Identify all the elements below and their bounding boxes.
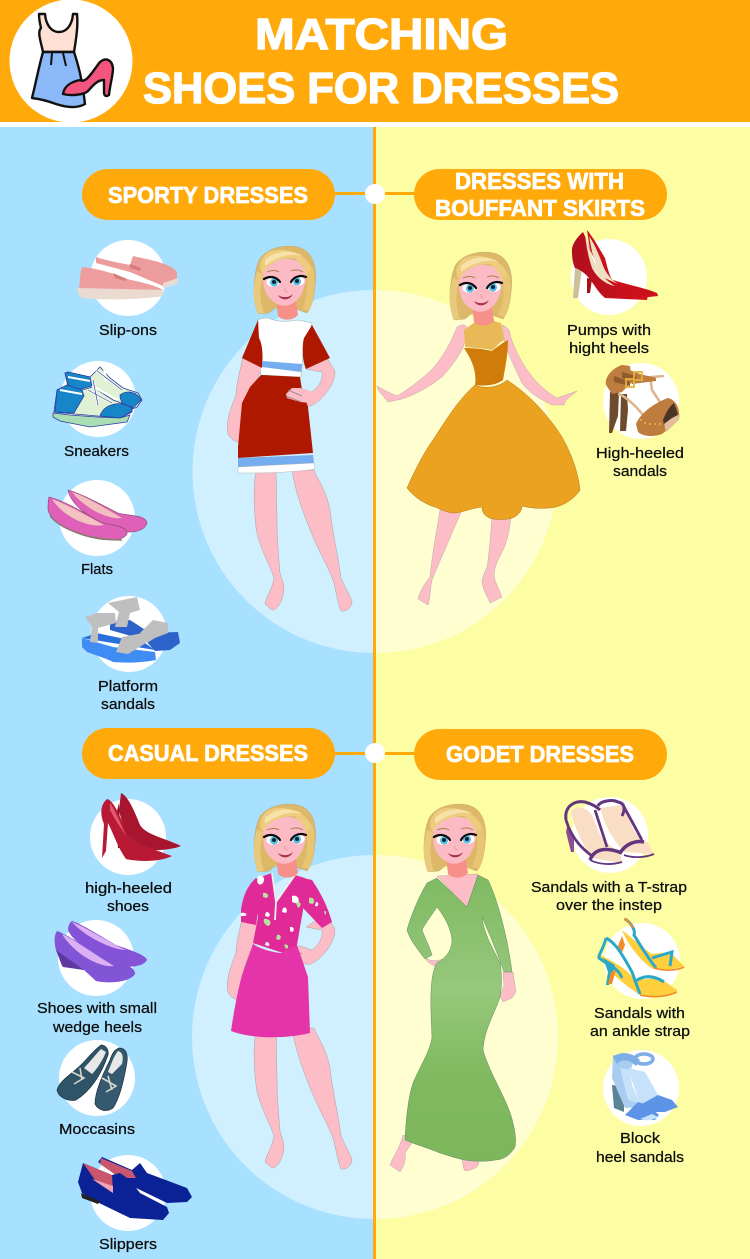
icon: slip-ons <box>78 240 178 316</box>
label: high-heeled sandals: sandals <box>613 463 667 480</box>
header banner: SHOES FOR DRESSES <box>143 64 619 113</box>
figure: woman in green godet dress <box>390 804 516 1172</box>
label: sneakers: Sneakers <box>64 443 129 460</box>
label: sandals with a t-strap: Sandals with a T-strap <box>531 879 687 896</box>
icon: sandals with a t-strap <box>566 797 654 873</box>
label: shoes with small wedge heels <box>37 1000 157 1036</box>
panel: godet dresses <box>390 729 690 1172</box>
label: high-heeled shoes: high-heeled <box>85 880 172 897</box>
backdrop circle top left <box>192 290 374 653</box>
icon: moccasins <box>57 1040 135 1116</box>
panel: dresses with bouffant skirts <box>377 168 684 605</box>
label: high-heeled sandals <box>596 445 684 480</box>
figure: woman in pink casual dress <box>227 804 352 1169</box>
label: slip-ons: Slip-ons <box>99 322 157 339</box>
right background panel <box>376 127 750 1259</box>
label: sandals with an ankle strap: an ankle strap <box>590 1023 690 1040</box>
icon: sneakers <box>53 361 142 437</box>
icon: flats <box>48 480 147 556</box>
figure: woman in orange bouffant dress <box>377 252 580 605</box>
label: sandals with an ankle strap: Sandals with <box>594 1005 685 1022</box>
backdrop circle bottom left <box>192 855 374 1219</box>
backdrop circle bottom right <box>376 855 558 1219</box>
figure: woman in red sporty dress <box>227 246 352 611</box>
label: flats: Flats <box>81 561 113 578</box>
icon: shoes with small wedge heels <box>55 920 147 996</box>
icon: block heel sandals <box>603 1050 679 1126</box>
connector: bottom headings <box>335 743 414 763</box>
label: shoes with small wedge heels: wedge heels <box>52 1019 142 1036</box>
heading: dresses with bouffant skirts <box>414 168 667 221</box>
label: pumps with high heels <box>567 322 651 357</box>
heading: dresses with bouffant skirts: DRESSES WITH <box>455 168 624 194</box>
label: slippers: Slippers <box>99 1236 157 1253</box>
label: block heel sandals: Block <box>620 1130 661 1147</box>
label: high-heeled sandals: High-heeled <box>596 445 684 462</box>
header icon: dress and shoe <box>10 0 132 122</box>
center divider line <box>373 127 376 1259</box>
backdrop circle top right <box>376 290 558 653</box>
title: MATCHING <box>255 10 508 59</box>
header banner <box>0 0 750 122</box>
heading: sporty dresses <box>82 169 335 220</box>
label: high-heeled shoes <box>85 880 172 915</box>
label: sandals with a t-strap <box>531 879 687 914</box>
icon: slippers <box>78 1155 192 1231</box>
label: block heel sandals: heel sandals <box>596 1149 684 1166</box>
left background panel <box>0 127 374 1259</box>
heading: dresses with bouffant skirts: BOUFFANT SKIRTS <box>435 195 645 221</box>
label: high-heeled shoes: shoes <box>107 898 149 915</box>
icon: platform sandals <box>82 596 180 672</box>
label: moccasins: Moccasins <box>59 1121 135 1138</box>
label: platform sandals <box>98 678 158 713</box>
icon: high-heeled shoes <box>90 793 181 875</box>
icon: high-heeled sandals <box>603 363 680 439</box>
label: block heel sandals <box>596 1130 684 1166</box>
label: sandals with an ankle strap <box>590 1005 690 1040</box>
icon: sandals with an ankle strap <box>599 919 684 999</box>
label: sandals with a t-strap: over the instep <box>556 897 662 914</box>
panel: sporty dresses <box>48 169 352 713</box>
label: shoes with small wedge heels: Shoes with small <box>37 1000 157 1017</box>
label: platform sandals: Platform <box>98 678 158 695</box>
label: pumps with high heels: Pumps with <box>567 322 651 339</box>
icon: pumps with high heels <box>571 230 658 315</box>
panel: casual dresses <box>37 728 352 1253</box>
connector: top headings <box>335 184 414 204</box>
heading: casual dresses <box>82 728 335 779</box>
label: platform sandals: sandals <box>101 696 155 713</box>
heading: godet dresses: GODET DRESSES <box>446 741 634 767</box>
heading: casual dresses: CASUAL DRESSES <box>108 740 308 766</box>
heading: sporty dresses: SPORTY DRESSES <box>108 182 308 208</box>
label: pumps with high heels: hight heels <box>569 340 649 357</box>
heading: godet dresses <box>414 729 667 780</box>
